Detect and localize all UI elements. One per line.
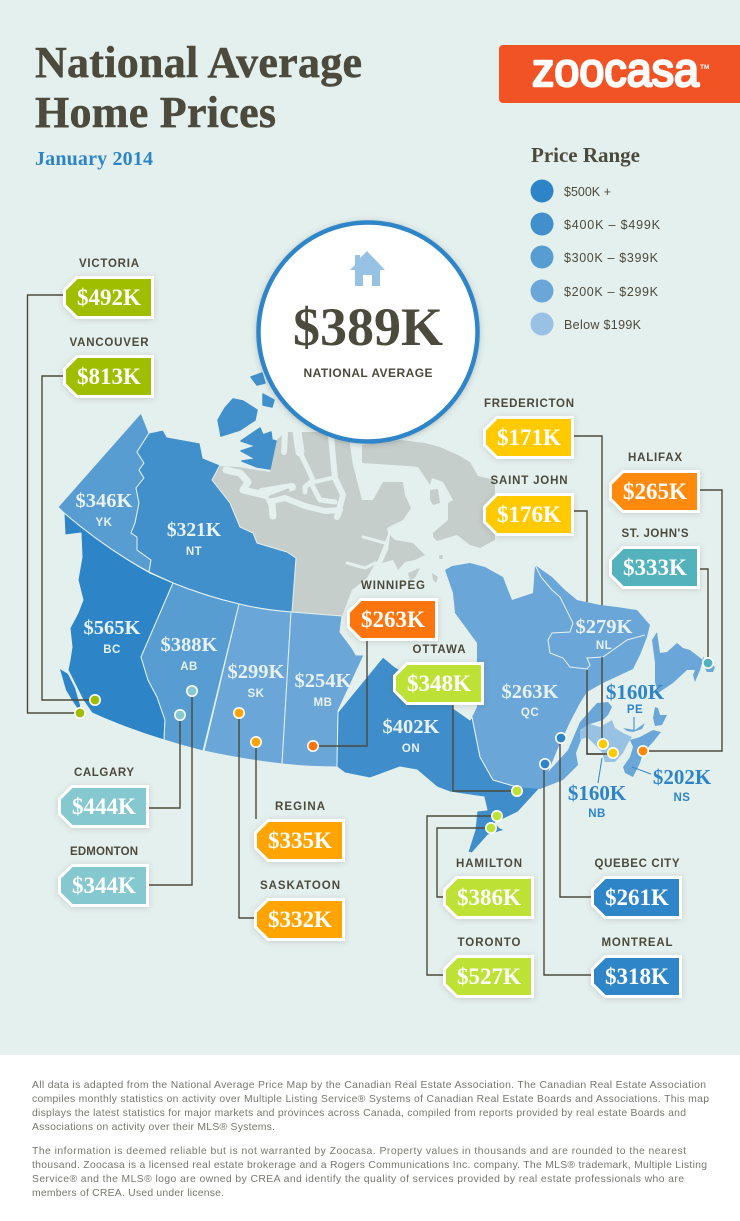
region: Vancouver Island — [60, 669, 80, 712]
tag: Winnipeg: WINNIPEG — [361, 580, 425, 592]
provincial prices on map: YK — [96, 517, 113, 529]
legend: price range: Price Range — [531, 143, 640, 167]
tag: Quebec City: $261K — [605, 885, 669, 910]
boundary: Quebec and Labrador — [535, 565, 645, 669]
maritime province prices: PE — [627, 704, 643, 716]
province: Ontario — [337, 657, 540, 853]
tag: Saint John — [484, 475, 572, 534]
tag: Calgary: CALGARY — [74, 767, 134, 779]
tag: Hamilton — [444, 858, 532, 918]
tag: Saint John: $176K — [497, 502, 561, 527]
region: northern blue islands — [218, 373, 276, 469]
tag: Ottawa: $348K — [407, 671, 471, 696]
provincial prices on map: MB — [314, 697, 332, 709]
legend: price range: $300K – $399K — [564, 251, 659, 265]
footer text: disclaimer — [32, 1146, 707, 1199]
logo: zoocasa: zoocasa — [532, 43, 700, 96]
tag: Vancouver — [64, 337, 152, 396]
footer text: disclaimer: thousand. Zoocasa is a licensed real estate brokerage and a Rogers Communications Inc. company. The MLS® trademark, Multiple Listing — [32, 1160, 707, 1171]
title — [35, 38, 362, 137]
province: Yukon — [58, 413, 151, 572]
title: Home Prices — [35, 88, 276, 137]
national average circle — [258, 222, 478, 442]
footer text: data source: Associations on activity over their MLS® Systems. — [32, 1122, 275, 1133]
maritime province prices: NB — [588, 808, 606, 820]
tag: Victoria: $492K — [77, 285, 141, 310]
title: National Average — [35, 38, 362, 87]
tag: Victoria: VICTORIA — [79, 258, 139, 270]
province: Newfoundland — [652, 632, 715, 693]
provincial prices on map: AB — [180, 661, 198, 673]
footer text: disclaimer: The information is deemed reliable but is not warranted by Zoocasa. Property values in thousands and are rounded to the nearest — [32, 1146, 686, 1157]
provincial prices on map: $254K — [295, 670, 352, 692]
logo: zoocasa: TM — [700, 64, 709, 71]
tag: Edmonton: $344K — [72, 873, 136, 898]
water channels through the arctic — [226, 432, 385, 568]
tag: St. John's: ST. JOHN'S — [622, 528, 689, 540]
province: Saskatchewan — [204, 604, 291, 764]
tag: Hamilton: $386K — [457, 885, 521, 910]
map of Canada — [58, 373, 715, 853]
tag: Winnipeg — [348, 580, 436, 640]
legend: price range: $200K – $299K — [564, 285, 659, 299]
tag: Halifax — [610, 452, 698, 512]
national average value: $389K — [293, 297, 443, 357]
maritime province prices — [568, 680, 712, 820]
tag: Montreal — [592, 937, 680, 996]
connector lines — [28, 295, 722, 975]
province: Manitoba — [282, 612, 364, 767]
tag: Regina — [256, 801, 344, 860]
tag: Edmonton — [60, 846, 148, 906]
tag: Vancouver: $813K — [77, 364, 141, 389]
tag: Saskatoon — [256, 880, 344, 940]
tag: Toronto: $527K — [457, 964, 521, 989]
maritime province prices: $160K — [606, 680, 665, 704]
legend: price range — [530, 143, 661, 336]
provincial prices on map: NL — [596, 640, 612, 652]
tag: St. John's — [610, 528, 698, 588]
tag: Regina: $335K — [268, 828, 332, 853]
tag: Winnipeg: $263K — [361, 607, 425, 632]
footer text: data source — [32, 1080, 709, 1133]
tag: Halifax: HALIFAX — [628, 452, 682, 464]
tag: Edmonton: EDMONTON — [70, 846, 138, 858]
tag: Fredericton — [484, 398, 574, 458]
legend: price range: $400K – $499K — [564, 218, 661, 232]
maritime province prices: $202K — [653, 765, 712, 789]
tag: Fredericton: $171K — [497, 425, 561, 450]
tag: Ottawa: OTTAWA — [412, 644, 466, 656]
provincial prices on map: SK — [248, 688, 265, 700]
city markers — [75, 658, 713, 833]
footer text: disclaimer: members of CREA. Used under license. — [32, 1188, 224, 1199]
connector lines above Labrador — [574, 436, 602, 607]
tag: Quebec City: QUEBEC CITY — [594, 858, 680, 870]
logo: zoocasa — [499, 43, 740, 103]
maritime province prices: NS — [674, 792, 690, 804]
legend: price range: Below $199K — [564, 318, 642, 332]
boundary: Quebec and Ontario — [472, 717, 517, 787]
tag: Calgary — [60, 767, 148, 826]
province: Nova Scotia — [623, 707, 667, 777]
province: New Brunswick — [580, 720, 632, 762]
tag: Vancouver: VANCOUVER — [70, 337, 149, 349]
legend: price range: $500K + — [564, 185, 611, 199]
provincial prices on map: $565K — [84, 617, 141, 639]
tag: Regina: REGINA — [275, 801, 325, 813]
region: Nunavut and arctic islands (grey) — [212, 432, 495, 616]
provincial prices on map: BC — [103, 644, 121, 656]
tag: Montreal: $318K — [605, 964, 669, 989]
footer text: data source: All data is adapted from the National Average Price Map by the Canadian Real Estate Association. The Canadian Real Estate Association — [32, 1080, 706, 1091]
tag: Halifax: $265K — [623, 479, 687, 504]
footer text: data source: compiles monthly statistics on activity over Multiple Listing Service® Systems of Canadian Real Estate Boards and Associations. This map — [32, 1094, 709, 1105]
provincial prices on map: $299K — [228, 661, 285, 683]
provincial prices on map: NT — [186, 546, 202, 558]
tag: Toronto — [444, 937, 532, 996]
provincial prices on map: QC — [521, 707, 539, 719]
tag: Saskatoon: $332K — [268, 907, 332, 932]
provincial prices on map: $346K — [76, 490, 133, 512]
tag: Saint John: SAINT JOHN — [490, 475, 568, 487]
provincial prices on map: $279K — [576, 616, 633, 638]
provincial prices on map: $402K — [383, 716, 440, 738]
province: Prince Edward Island — [623, 723, 645, 732]
footer panel — [0, 1055, 740, 1221]
tag: Saskatoon: SASKATOON — [260, 880, 340, 892]
tag: Hamilton: HAMILTON — [456, 858, 522, 870]
tag: Fredericton: FREDERICTON — [484, 398, 574, 410]
footer text: data source: displays the latest statistics for major markets and provinces across Canada, compiled from reports provided by real estate Boards and — [32, 1108, 686, 1119]
provincial prices on map: $263K — [502, 681, 559, 703]
provincial prices on map: ON — [402, 743, 420, 755]
provincial prices on map: $388K — [161, 634, 218, 656]
province: British Columbia — [64, 513, 173, 740]
tag: Calgary: $444K — [72, 794, 136, 819]
national average label: NATIONAL AVERAGE — [304, 366, 432, 380]
tag: Victoria — [64, 258, 152, 318]
footer text: disclaimer: Service® and the MLS® logo are owned by CREA and identify the quality of services provided by real estate professionals who are — [32, 1174, 684, 1185]
provincial prices on map: $321K — [167, 520, 222, 541]
provincial prices on map — [76, 490, 633, 755]
province: Northwest Territories — [131, 430, 296, 612]
tag: Quebec City — [592, 858, 680, 918]
tag: Toronto: TORONTO — [458, 937, 521, 949]
connector lines below map — [587, 657, 613, 754]
date subtitle: January 2014 — [35, 148, 153, 170]
tag: St. John's: $333K — [623, 555, 687, 580]
tag: Montreal: MONTREAL — [602, 937, 672, 949]
province: Quebec and Labrador — [445, 563, 650, 789]
maritime province prices: $160K — [568, 781, 627, 805]
tag: Ottawa — [394, 644, 482, 704]
icon: house — [350, 251, 385, 286]
province: Alberta — [141, 583, 239, 751]
